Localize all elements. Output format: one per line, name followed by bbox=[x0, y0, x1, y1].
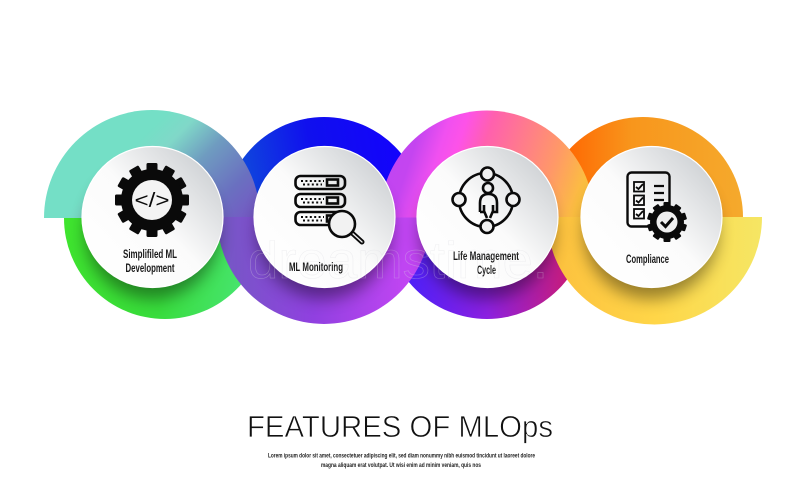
ring 4 upper half: orange bbox=[543, 117, 743, 217]
disc 3 bbox=[417, 146, 558, 288]
panel: Simplified ML Development bbox=[82, 146, 223, 288]
disc shadows bbox=[85, 165, 718, 299]
body text: magna aliquam erat volutpat. Ut wisi enim ad minim veniam, quis nos bbox=[321, 462, 481, 469]
icon: checklist with gear bbox=[628, 172, 687, 242]
label: Simplifiled ML Development: Simplifiled ML bbox=[123, 247, 177, 261]
icon: servers with magnifier bbox=[296, 176, 362, 242]
label: ML Monitoring: ML Monitoring bbox=[289, 260, 343, 274]
ring 2 lower half: purple bbox=[217, 217, 431, 324]
body text bbox=[268, 452, 535, 469]
label: Life Management Cycle bbox=[453, 249, 519, 277]
watermark: dreamstime. bbox=[248, 232, 548, 290]
body text: Lorem ipsum dolor sit amet, consectetuer adipiscing elit, sed diam nonummy nibh euismod tincidunt ut laoreet dolore bbox=[268, 452, 535, 460]
disc 4 bbox=[581, 146, 722, 288]
label: Simplifiled ML Development: Development bbox=[126, 261, 174, 275]
ring 3 upper half: pink bbox=[380, 111, 594, 218]
ring 1 upper half: teal bbox=[44, 110, 260, 218]
label: Compliance: Compliance bbox=[626, 252, 669, 266]
disc 2 bbox=[254, 146, 395, 288]
label: Life Management Cycle: Cycle bbox=[477, 263, 496, 277]
icon: code gear bbox=[115, 163, 189, 237]
ring 4 lower half: yellow bbox=[547, 217, 762, 324]
label: Life Management Cycle: Life Management bbox=[453, 249, 519, 263]
label: Simplifiled ML Development bbox=[123, 247, 177, 275]
disc 1 bbox=[82, 146, 223, 288]
panel: Compliance bbox=[581, 146, 722, 288]
panel: ML Monitoring bbox=[254, 146, 395, 288]
ring 3 lower half: violet bbox=[386, 218, 588, 319]
icon: code gear: </> bbox=[134, 190, 170, 212]
ring 2 upper half: blue bbox=[224, 117, 424, 217]
ring 1 lower half: green bbox=[64, 218, 266, 319]
panel: Life Management Cycle bbox=[417, 146, 558, 288]
icon: person in cycle bbox=[452, 168, 520, 233]
title: FEATURES OF MLOps bbox=[247, 409, 553, 444]
